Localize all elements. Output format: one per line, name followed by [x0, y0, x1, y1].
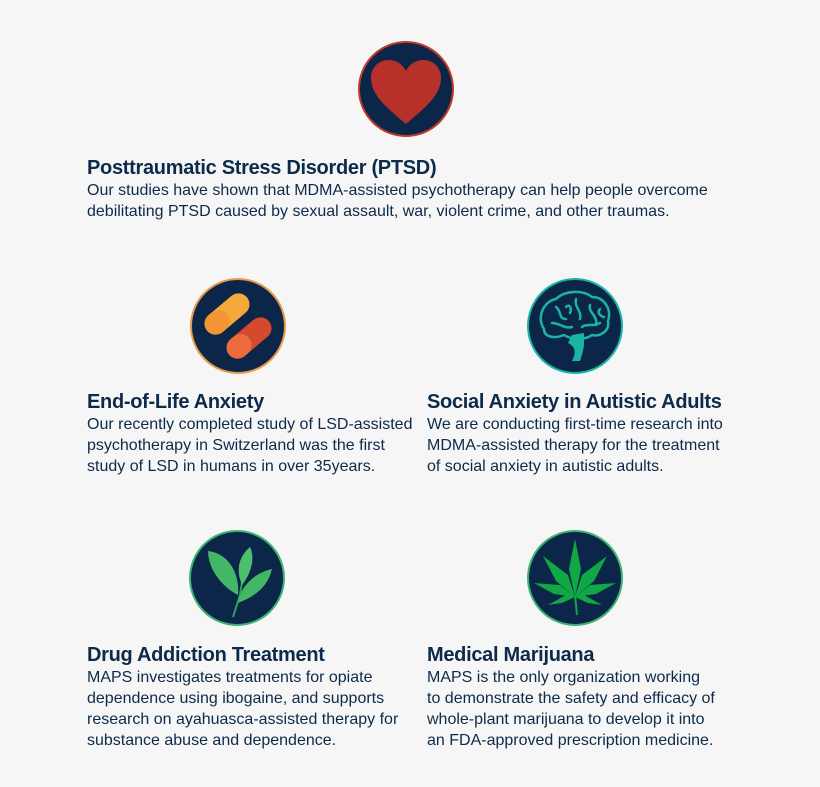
text: Medical Marijuana: whole-plant marijuana to develop it into	[427, 711, 704, 728]
text: Social Anxiety	[427, 391, 723, 475]
text: PTSD	[87, 157, 708, 220]
text: Drug Addiction	[87, 644, 398, 749]
text: Drug Addiction: Drug Addiction Treatment	[87, 644, 325, 666]
icon: pills	[190, 278, 286, 374]
text: PTSD: Posttraumatic Stress Disorder (PTSD)	[87, 157, 436, 179]
text: Medical Marijuana: Medical Marijuana	[427, 644, 594, 666]
icon: heart	[358, 41, 454, 137]
text: Medical Marijuana: to demonstrate the safety and efficacy of	[427, 690, 715, 707]
text: Drug Addiction: substance abuse and dependence.	[87, 732, 336, 749]
icon: leaves	[189, 530, 285, 626]
text: Social Anxiety: of social anxiety in autistic adults.	[427, 458, 664, 475]
text: PTSD: Our studies have shown that MDMA-assisted psychotherapy can help people overcome	[87, 182, 708, 199]
text: End-of-Life Anxiety: study of LSD in humans in over 35years.	[87, 458, 375, 475]
text: PTSD: debilitating PTSD caused by sexual assault, war, violent crime, and other traumas.	[87, 203, 670, 220]
text: Medical Marijuana	[427, 644, 715, 749]
text: Drug Addiction: research on ayahuasca-assisted therapy for	[87, 711, 398, 728]
text: Social Anxiety: Social Anxiety in Autistic Adults	[427, 391, 722, 413]
text: Medical Marijuana: an FDA-approved prescription medicine.	[427, 732, 713, 749]
text: End-of-Life Anxiety: Our recently completed study of LSD-assisted	[87, 416, 412, 433]
text: Drug Addiction: MAPS investigates treatments for opiate	[87, 669, 372, 686]
text: End-of-Life Anxiety	[87, 391, 412, 475]
icon: marijuana	[527, 530, 623, 626]
text: Medical Marijuana: MAPS is the only organization working	[427, 669, 700, 686]
text: Social Anxiety: MDMA-assisted therapy for the treatment	[427, 437, 720, 454]
text: End-of-Life Anxiety: End-of-Life Anxiety	[87, 391, 264, 413]
icon: brain	[527, 278, 623, 374]
text: Social Anxiety: We are conducting first-time research into	[427, 416, 723, 433]
text: Drug Addiction: dependence using ibogaine, and supports	[87, 690, 384, 707]
text: End-of-Life Anxiety: psychotherapy in Switzerland was the first	[87, 437, 385, 454]
